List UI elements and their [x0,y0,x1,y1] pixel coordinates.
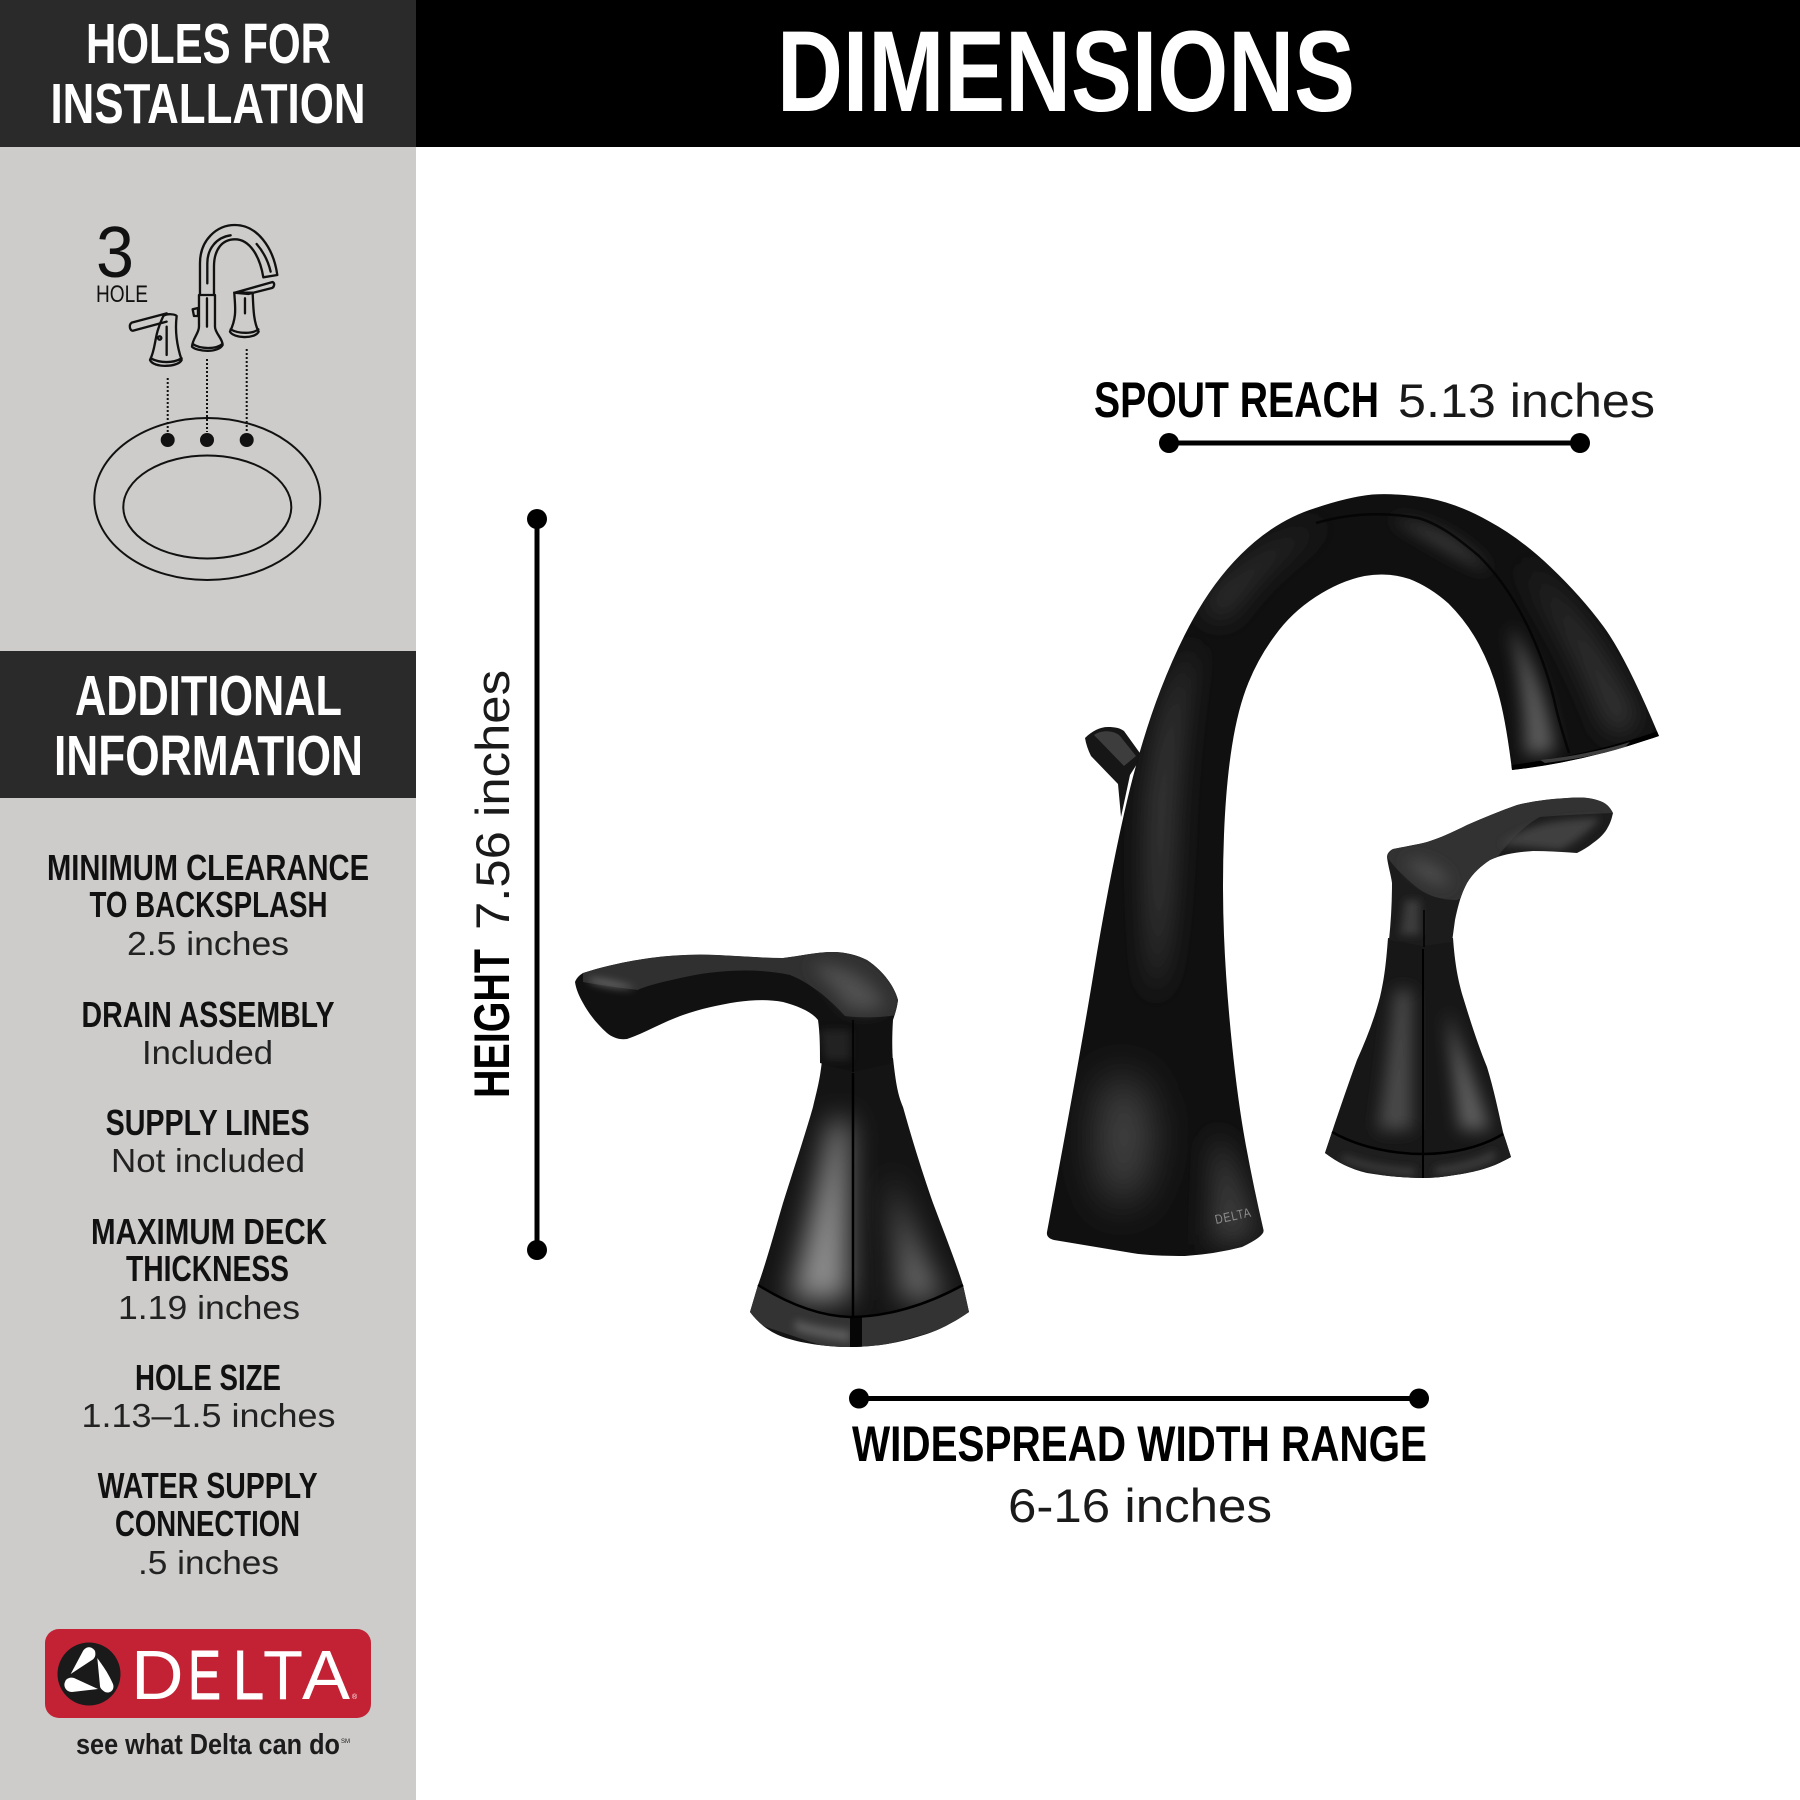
dimension: height [464,509,547,1260]
text block: minimum clearance [47,847,369,962]
title: dimensions [416,0,1800,147]
faucet: left handle [575,952,975,1355]
label: delta mark on spout: DELTA [1214,1205,1253,1227]
arch sheen [1200,536,1296,620]
heading: holes for installation [0,0,416,147]
logo: delta [45,1629,371,1718]
text block: maximum deck thickness [91,1211,327,1326]
nozzle rim [1511,731,1659,770]
dimension: height: 7.56 inches [466,670,519,930]
heading: additional information: ADDITIONAL [75,664,342,728]
text block: hole size [82,1357,336,1434]
panel: sidebar background [0,147,416,1800]
text block: maximum deck thickness: 1.19 inches [118,1289,300,1326]
label: 3 hole: HOLE [96,281,148,308]
spout underside sheen [1510,625,1555,755]
text block: minimum clearance: MINIMUM CLEARANCE [47,847,369,888]
logo wordmark: E [188,1636,221,1714]
crease [1316,514,1569,753]
text block: water supply connection: .5 inches [138,1544,279,1581]
product photo: faucet [575,494,1659,1355]
logo wordmark: L [233,1636,264,1714]
text block: water supply connection: CONNECTION [115,1503,300,1544]
icon: small faucet line drawing [130,225,277,366]
faucet: right handle [1320,797,1613,1185]
tagline: see what Delta can do [76,1729,340,1761]
icon: 3 hole sink diagram [94,213,320,580]
tagline: SM [341,1739,350,1745]
text block: supply lines: Not included [111,1142,305,1179]
icon: mounting holes [161,433,254,447]
heading: additional information [0,651,416,798]
text block: maximum deck thickness: THICKNESS [126,1248,289,1289]
logo wordmark: T [263,1636,303,1714]
label: 3 hole: 3 [96,213,134,293]
heading: holes for installation: HOLES FOR [86,12,331,76]
dimension: spout reach: 5.13 inches [1398,374,1655,427]
dimension: height: HEIGHT [464,949,520,1098]
logo wordmark: ® [352,1693,358,1701]
heading: holes for installation: INSTALLATION [50,72,366,136]
heading: additional information: INFORMATION [54,724,363,788]
text block: hole size: 1.13–1.5 inches [82,1397,336,1434]
text block: drain assembly: Included [142,1034,273,1071]
logo wordmark: D [131,1636,184,1714]
label: 3 hole [96,213,148,308]
title: dimensions: DIMENSIONS [777,8,1355,136]
dimension: widespread width range: 6-16 inches [1008,1479,1272,1532]
text block: supply lines [106,1102,310,1179]
icon: sink basin [94,418,320,580]
text block: maximum deck thickness: MAXIMUM DECK [91,1211,327,1252]
text block: minimum clearance: 2.5 inches [127,925,289,962]
text block: minimum clearance: TO BACKSPLASH [90,884,328,925]
text block: water supply connection: WATER SUPPLY [98,1465,318,1506]
left neck sheen [1146,640,1195,1000]
lower body sheen [1099,1076,1150,1205]
icon: delta triangle mark [58,1642,120,1706]
text block: drain assembly: DRAIN ASSEMBLY [82,994,334,1035]
icon: dotted guide lines [168,349,247,432]
text block: hole size: HOLE SIZE [135,1357,281,1398]
logo wordmark [131,1636,358,1714]
faucet: pop-up lever [1085,727,1142,817]
dimension: spout reach: SPOUT REACH [1094,372,1379,428]
logo wordmark: A [302,1636,350,1714]
text block: supply lines: SUPPLY LINES [106,1102,310,1143]
dimension: widespread width range [849,1388,1429,1532]
faucet: spout [1047,494,1659,1256]
dimension: widespread width range: WIDESPREAD WIDTH RANGE [852,1416,1427,1472]
outer crown sheen [1539,584,1641,738]
nozzle aerator [1540,742,1630,763]
text block: drain assembly [82,994,334,1071]
dimension: spout reach [1094,372,1655,453]
text block: water supply connection [98,1465,318,1581]
